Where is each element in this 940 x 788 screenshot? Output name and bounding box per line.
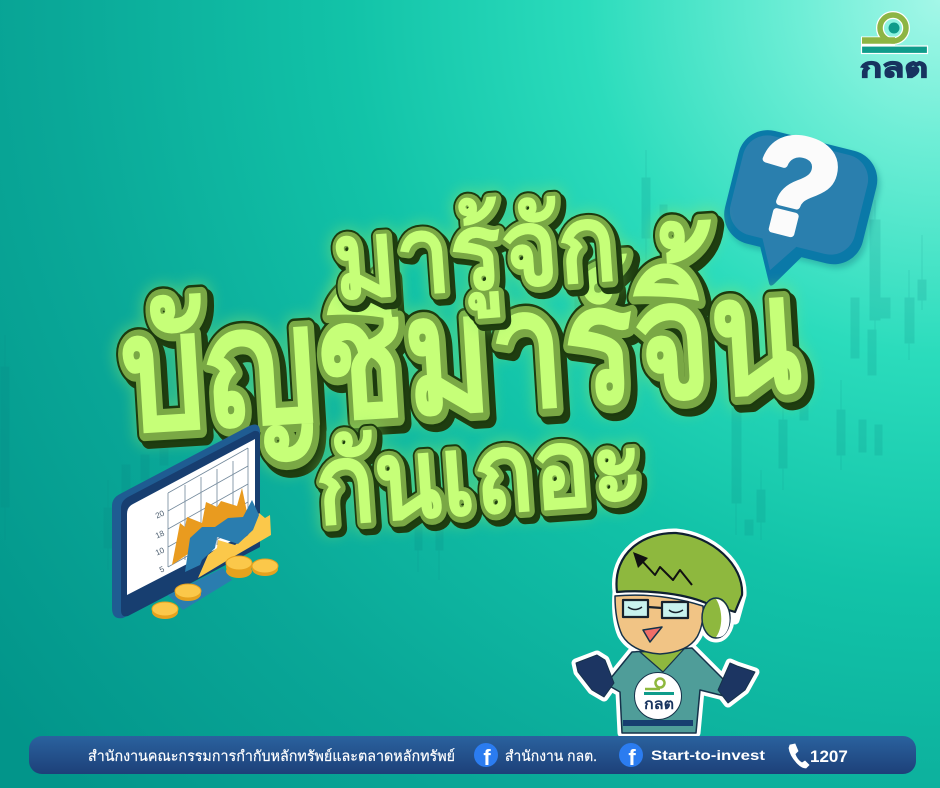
mascot helmet arrow	[643, 562, 692, 585]
mascot collar	[640, 649, 684, 672]
mascot right glove	[718, 663, 755, 703]
monitor stand	[168, 568, 232, 610]
chart axis labels: 10	[154, 545, 166, 557]
monitor frame	[112, 424, 260, 618]
logo ring	[861, 15, 906, 41]
icon: facebook 1: f	[483, 745, 491, 770]
bubble shadow	[721, 128, 886, 275]
chart axis labels: 5	[158, 564, 166, 575]
title line 1: มารู้จัก	[328, 181, 621, 329]
icon: facebook 2: f	[628, 745, 636, 770]
mascot glasses	[623, 600, 688, 618]
mascot body	[606, 648, 728, 733]
icon: monitor with chart	[112, 424, 278, 619]
footer bar	[29, 736, 916, 774]
chart grid	[168, 448, 248, 567]
title line 3: กันเถอะ	[312, 402, 648, 549]
mascot badge: กลต	[644, 696, 674, 713]
icon: facebook 2	[619, 743, 643, 770]
footer facebook name 2: Start-to-invest	[651, 748, 766, 763]
title line 3: กันเถอะ	[311, 401, 647, 548]
bubble face	[718, 130, 873, 288]
mascot eyes	[628, 607, 683, 612]
blue area	[185, 500, 259, 572]
chart axis labels	[154, 508, 166, 575]
title	[114, 181, 811, 553]
title line 3: กันเถอะ	[316, 406, 652, 553]
chart axis labels: 20	[154, 508, 166, 520]
title line 3: กันเถอะ	[312, 402, 648, 549]
icon: phone	[789, 744, 809, 768]
footer background	[29, 736, 916, 774]
chart axis labels: 18	[154, 528, 166, 540]
mascot badge	[634, 672, 682, 720]
mascot mouth	[643, 627, 662, 642]
mascot headphone	[702, 598, 730, 638]
mascot face	[615, 595, 703, 654]
footer phone number: 1207	[810, 747, 848, 766]
title line 1: มารู้จัก	[333, 186, 625, 334]
mascot white outline	[576, 533, 755, 733]
icon: facebook 1	[474, 743, 498, 770]
mascot helmet	[616, 533, 742, 612]
logo bar	[862, 46, 928, 54]
mascot left glove	[576, 655, 614, 697]
coins	[152, 556, 278, 619]
monitor screen	[127, 439, 255, 595]
title line 1: มารู้จัก	[330, 182, 622, 330]
logo: SEC Thailand	[860, 15, 928, 83]
footer facebook name 1: สำนักงาน กลต.	[505, 749, 597, 765]
question mark: ?	[737, 103, 854, 270]
orange area	[172, 488, 248, 565]
title line 1: มารู้จัก	[330, 182, 622, 330]
icon: question speech bubble	[709, 103, 886, 305]
title line 3: กันเถอะ	[312, 402, 648, 549]
yellow area	[198, 513, 271, 578]
logo text: กลต	[860, 53, 928, 83]
bubble base	[709, 124, 884, 305]
mascot belt	[623, 720, 693, 726]
candlestick backdrop	[1, 150, 926, 580]
title line 1: มารู้จัก	[330, 182, 622, 330]
mascot character	[576, 533, 755, 733]
footer organisation name: สำนักงานคณะกรรมการกำกับหลักทรัพย์และตลาดหลักทรัพย์	[88, 748, 455, 765]
